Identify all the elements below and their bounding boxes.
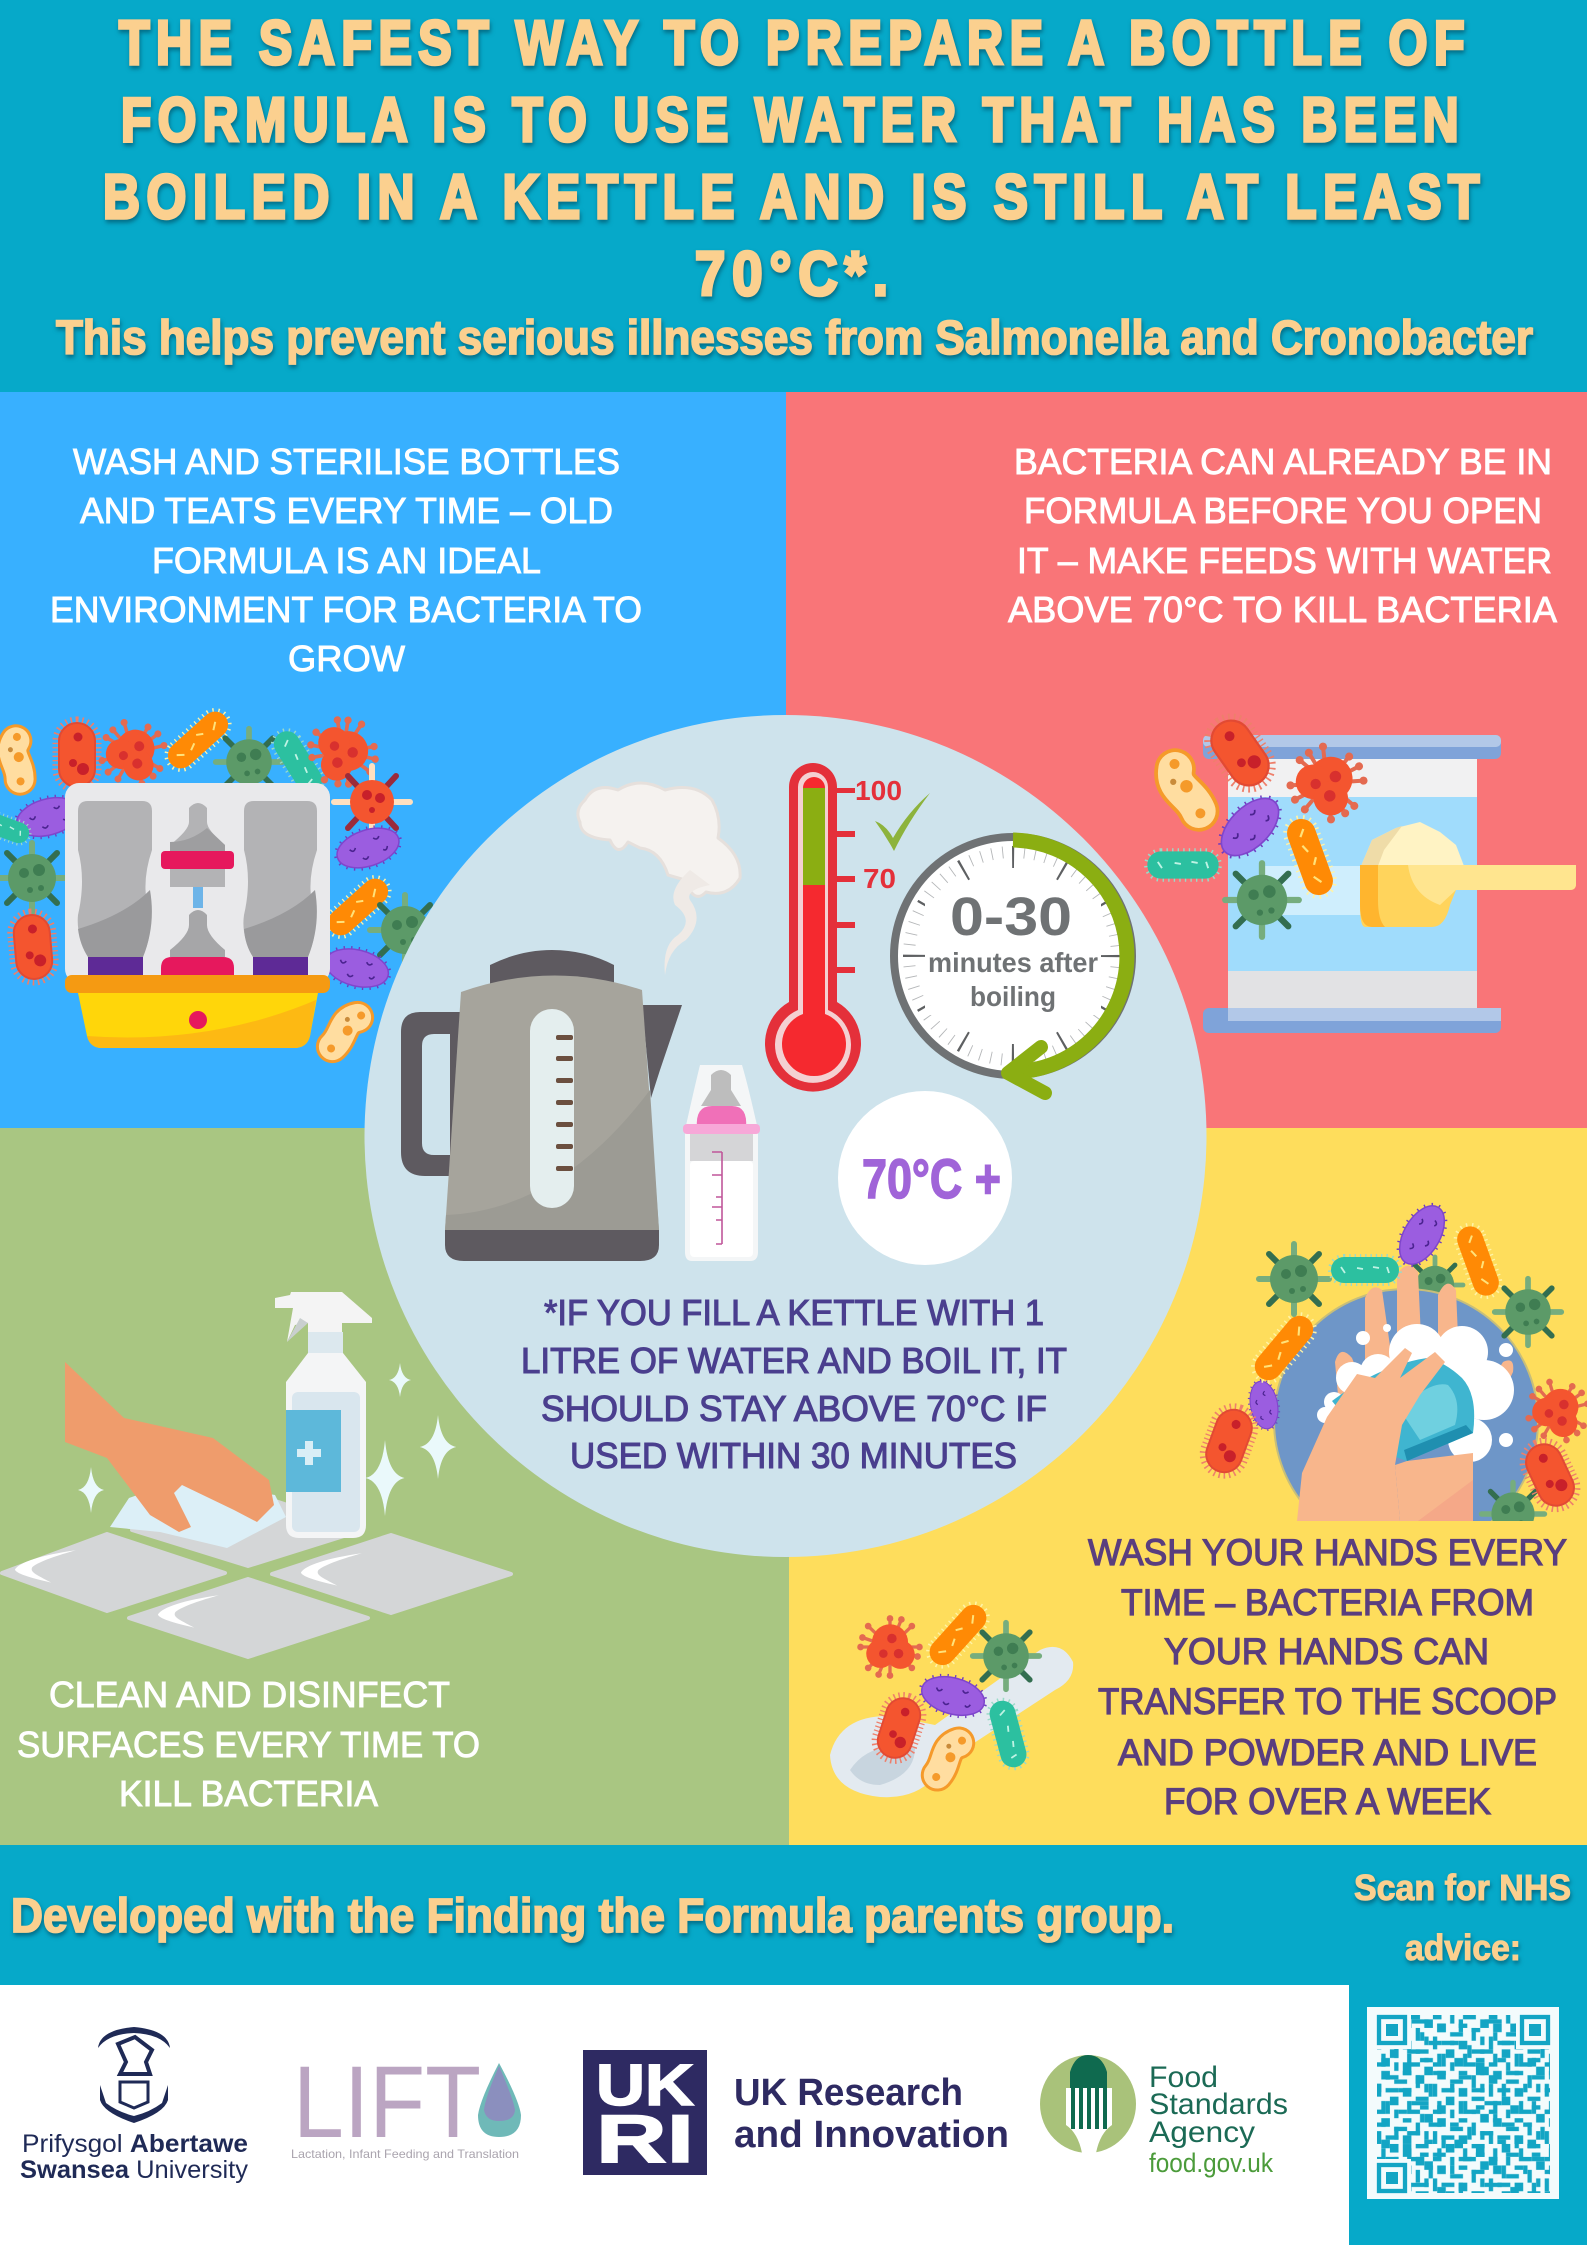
badge: 70°C + <box>838 1091 1012 1265</box>
icon: baby bottle <box>683 1065 760 1261</box>
icon: scoop with powder <box>1360 822 1576 927</box>
icon: hand washing with soap <box>1247 1257 1544 1553</box>
badge: 70°C +: 70°C + <box>862 1147 1001 1210</box>
text: wash and sterilise: FORMULA IS AN IDEAL <box>152 540 541 581</box>
title <box>103 9 1486 309</box>
icon: clock 0-30 minutes: boiling <box>970 981 1056 1012</box>
icon: clock 0-30 minutes <box>894 837 1132 1093</box>
icon: bacteria on tin <box>1147 713 1382 937</box>
logo: UKRI: and Innovation <box>734 2114 1009 2156</box>
icon: bacteria around steriliser <box>0 706 440 1054</box>
text: kettle footnote: SHOULD STAY ABOVE 70°C IF <box>541 1388 1047 1429</box>
text: developed with parents group: Developed with the Finding the Formula parents group. <box>11 1890 1174 1943</box>
panel: central circle <box>364 715 1206 1557</box>
icon: thermometer <box>765 763 902 1092</box>
panel: partner logos <box>0 1985 1349 2245</box>
text: wash your hands: TIME – BACTERIA FROM <box>1121 1582 1534 1623</box>
icon: formula tin <box>1203 735 1501 1033</box>
icon: spray bottle <box>275 1292 372 1538</box>
text: wash your hands: AND POWDER AND LIVE <box>1118 1732 1537 1773</box>
icon: steriliser <box>65 783 330 1048</box>
logo: UKRI <box>583 2050 1009 2177</box>
text: bacteria in formula: IT – MAKE FEEDS WITH WATER <box>1017 540 1552 581</box>
icon: thermometer: 70 <box>863 863 896 894</box>
text: wash your hands: WASH YOUR HANDS EVERY <box>1088 1532 1567 1573</box>
text: scan for NHS advice: Scan for NHS <box>1354 1867 1571 1908</box>
logo: Food Standards Agency: food.gov.uk <box>1149 2148 1273 2178</box>
panel: wash and sterilise <box>0 392 786 1128</box>
text: bacteria in formula: ABOVE 70°C TO KILL BACTERIA <box>1008 589 1557 630</box>
text: bacteria in formula: FORMULA BEFORE YOU OPEN <box>1024 490 1542 531</box>
logo: Swansea University: Prifysgol Abertawe <box>22 2130 248 2158</box>
panel: clean and disinfect <box>0 1128 789 1845</box>
text: wash and sterilise: ENVIRONMENT FOR BACTERIA TO <box>50 589 642 630</box>
icon: sparkles <box>78 1363 456 1516</box>
icon: steam <box>578 783 740 975</box>
text: kettle footnote: *IF YOU FILL A KETTLE WITH 1 <box>544 1292 1044 1333</box>
text: wash and sterilise: GROW <box>288 638 405 679</box>
logo: Swansea University: Swansea University <box>20 2156 249 2184</box>
icon: bacteria around hands <box>1201 1198 1587 1512</box>
panel: bacteria in formula <box>786 392 1587 1128</box>
icon: scoop with bacteria <box>830 1600 1073 1797</box>
logo: Swansea University <box>20 2027 249 2184</box>
text: kettle footnote <box>521 1292 1067 1476</box>
icon: cloth <box>110 1480 286 1548</box>
icon: hand <box>65 1362 274 1532</box>
icon: clock 0-30 minutes: 0-30 <box>950 887 1072 947</box>
text: wash and sterilise <box>50 441 642 679</box>
header panel background <box>0 0 1587 392</box>
logo: Food Standards Agency: Food <box>1149 2061 1218 2094</box>
title: 70°C*. <box>695 240 895 309</box>
logo: UKRI: UK Research <box>734 2072 963 2114</box>
text: kettle footnote: USED WITHIN 30 MINUTES <box>570 1435 1017 1476</box>
logo: UKRI: RI <box>596 2101 694 2177</box>
icon: thermometer: 100 <box>855 775 902 806</box>
text: wash and sterilise: WASH AND STERILISE BOTTLES <box>73 441 620 482</box>
text: bacteria in formula: BACTERIA CAN ALREADY BE IN <box>1014 441 1552 482</box>
logo: LIFT: LIFT <box>293 2045 481 2159</box>
icon: tile highlights <box>15 1550 362 1628</box>
text: wash your hands: YOUR HANDS CAN <box>1164 1631 1489 1672</box>
logo: Food Standards Agency <box>1040 2055 1288 2178</box>
footer band <box>0 1845 1587 2245</box>
text: wash your hands: FOR OVER A WEEK <box>1164 1781 1491 1822</box>
text: wash your hands: TRANSFER TO THE SCOOP <box>1098 1681 1557 1722</box>
text: kettle footnote: LITRE OF WATER AND BOIL IT, IT <box>521 1340 1067 1381</box>
icon: tick <box>875 793 930 851</box>
logo: UKRI: UK <box>596 2053 694 2118</box>
logo: LIFT: Lactation, Infant Feeding and Translation <box>291 2147 519 2161</box>
icon: kettle <box>401 950 682 1261</box>
icon: tiles <box>2 1492 511 1657</box>
panel: wash your hands <box>789 1128 1587 1845</box>
text: scan for NHS advice: advice: <box>1405 1927 1521 1968</box>
text: wash your hands <box>1088 1532 1567 1822</box>
text: clean and disinfect: SURFACES EVERY TIME TO <box>17 1724 480 1765</box>
text: scan for NHS advice <box>1354 1867 1571 1968</box>
text: clean and disinfect <box>17 1674 480 1814</box>
text: bacteria in formula <box>1008 441 1557 630</box>
text: clean and disinfect: KILL BACTERIA <box>119 1773 378 1814</box>
QR code <box>1367 2007 1559 2199</box>
text: wash and sterilise: AND TEATS EVERY TIME – OLD <box>80 490 613 531</box>
icon: clock 0-30 minutes: minutes after <box>928 947 1098 978</box>
text: clean and disinfect: CLEAN AND DISINFECT <box>49 1674 450 1715</box>
logo: Food Standards Agency: Standards <box>1149 2088 1288 2121</box>
logo: Food Standards Agency: Agency <box>1149 2116 1255 2149</box>
